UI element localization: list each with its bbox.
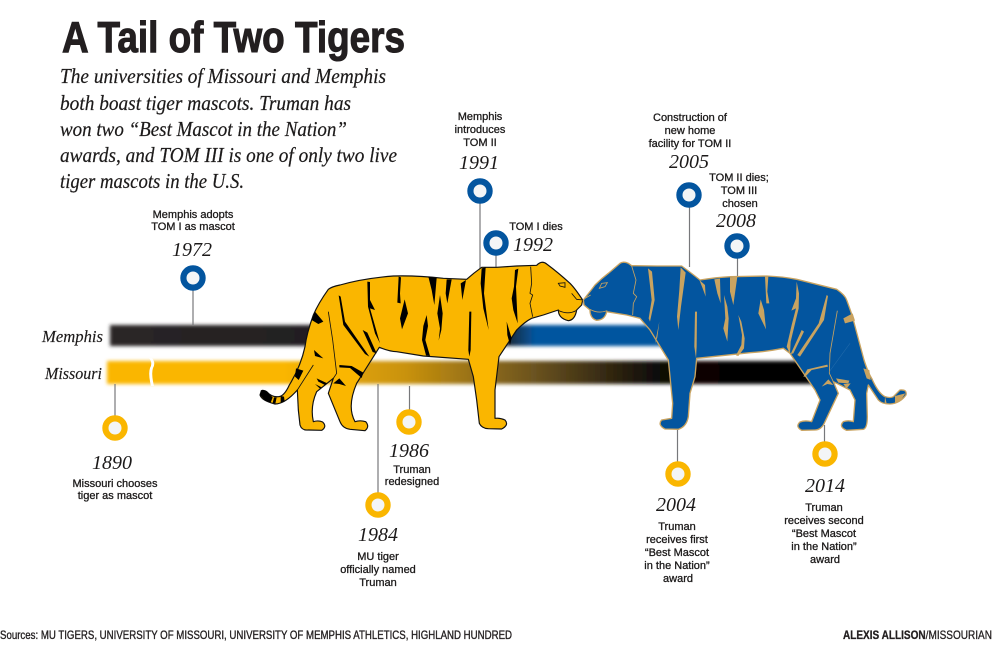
marker: 1890 [105,418,125,438]
event: 2005: new home [665,125,715,137]
event: 2008: TOM II dies; [709,172,769,184]
event: 1991: Memphis [458,111,503,123]
event: 1984: MU tiger [357,551,399,563]
event: 1984: Truman [359,577,397,589]
intro text: awards, and TOM III is one of only two live [60,143,397,167]
blue tiger face lines [585,266,850,382]
event: 1984: officially named [340,564,416,576]
intro text: tiger mascots in the U.S. [60,169,244,193]
marker lines [115,203,824,493]
event: 2005: 2005 [669,151,709,173]
event: 2004: 2004 [656,494,696,516]
illustration: gold tiger [260,262,583,431]
event: 2008: 2008 [716,210,756,232]
event: 1991 [455,111,506,174]
event: 2004: “Best Mascot [645,547,709,559]
marker: 2004 [668,464,688,484]
event: 1992: 1992 [513,234,553,256]
event: 1890 [73,452,158,502]
event: 1890: Missouri chooses [73,478,158,490]
credit: ALEXIS ALLISON/MISSOURIAN [843,628,992,642]
event: 1972: Memphis adopts [153,209,234,221]
event: 1991: TOM II [463,137,497,149]
event: 2014: award [810,554,840,566]
event: 2008: chosen [722,198,758,210]
event: 1890: 1890 [92,452,132,474]
event: 1972: 1972 [172,239,212,261]
bar: Memphis timeline [110,325,668,346]
marker: 2008 [727,236,747,256]
gold tiger face lines [297,267,583,390]
bar: Missouri timeline [107,358,817,386]
event: 1992: TOM I dies [509,221,563,233]
event: 1992 [509,221,563,256]
event: 1984: 1984 [358,524,398,546]
event: 2005 [649,112,731,173]
event: 1972 [151,209,235,261]
sources: Sources: MU TIGERS, UNIVERSITY OF MISSOURI, UNIVERSITY OF MEMPHIS ATHLETICS, HIGHLAND HUNDRED [0,628,512,642]
marker: 2014 [815,444,835,464]
blue tiger stripes [648,267,905,403]
event: 2004: in the Nation” [644,560,710,572]
event: 2004: Truman [658,521,696,533]
event: 2014: in the Nation” [791,541,857,553]
event: 1991: introduces [455,124,506,136]
event: 2005: Construction of [653,112,728,124]
event: 2004: receives first [646,534,708,546]
event: 1986: redesigned [385,476,439,488]
illustration: blue tiger [583,262,906,430]
event: 1986: 1986 [389,440,429,462]
label: Memphis: Memphis [41,327,103,346]
gold tiger stripes [260,267,518,404]
marker: 1972 [183,268,203,288]
marker: 2005 [679,185,699,205]
marker: 1992 [486,233,506,253]
event: 2004: award [663,573,693,585]
event: 2008: TOM III [721,185,757,197]
intro text: The universities of Missouri and Memphis [60,64,386,88]
event: 1984 [340,524,416,589]
event: 2014: Truman [805,502,843,514]
event: 1972: TOM I as mascot [151,221,235,233]
event: 1991: 1991 [459,152,499,174]
marker: 1991 [470,181,490,201]
intro text [60,64,397,193]
intro text: won two “Best Mascot in the Nation” [60,117,347,141]
event: 1890: tiger as mascot [78,490,152,502]
event: 1986: Truman [393,464,431,476]
title: A Tail of Two Tigers [62,13,405,62]
event: 2004 [644,494,710,585]
intro text: both boast tiger mascots. Truman has [60,91,351,115]
event: 2008 [709,172,769,232]
event: 2014: “Best Mascot [792,528,856,540]
marker: 1986 [399,412,419,432]
label: Missouri: Missouri [44,364,102,383]
event: 2005: facility for TOM II [649,138,731,150]
event: 2014: 2014 [805,475,845,497]
event: 1986 [385,440,439,488]
event: 2014 [784,475,864,566]
marker: 1984 [368,495,388,515]
event: 2014: receives second [784,515,864,527]
